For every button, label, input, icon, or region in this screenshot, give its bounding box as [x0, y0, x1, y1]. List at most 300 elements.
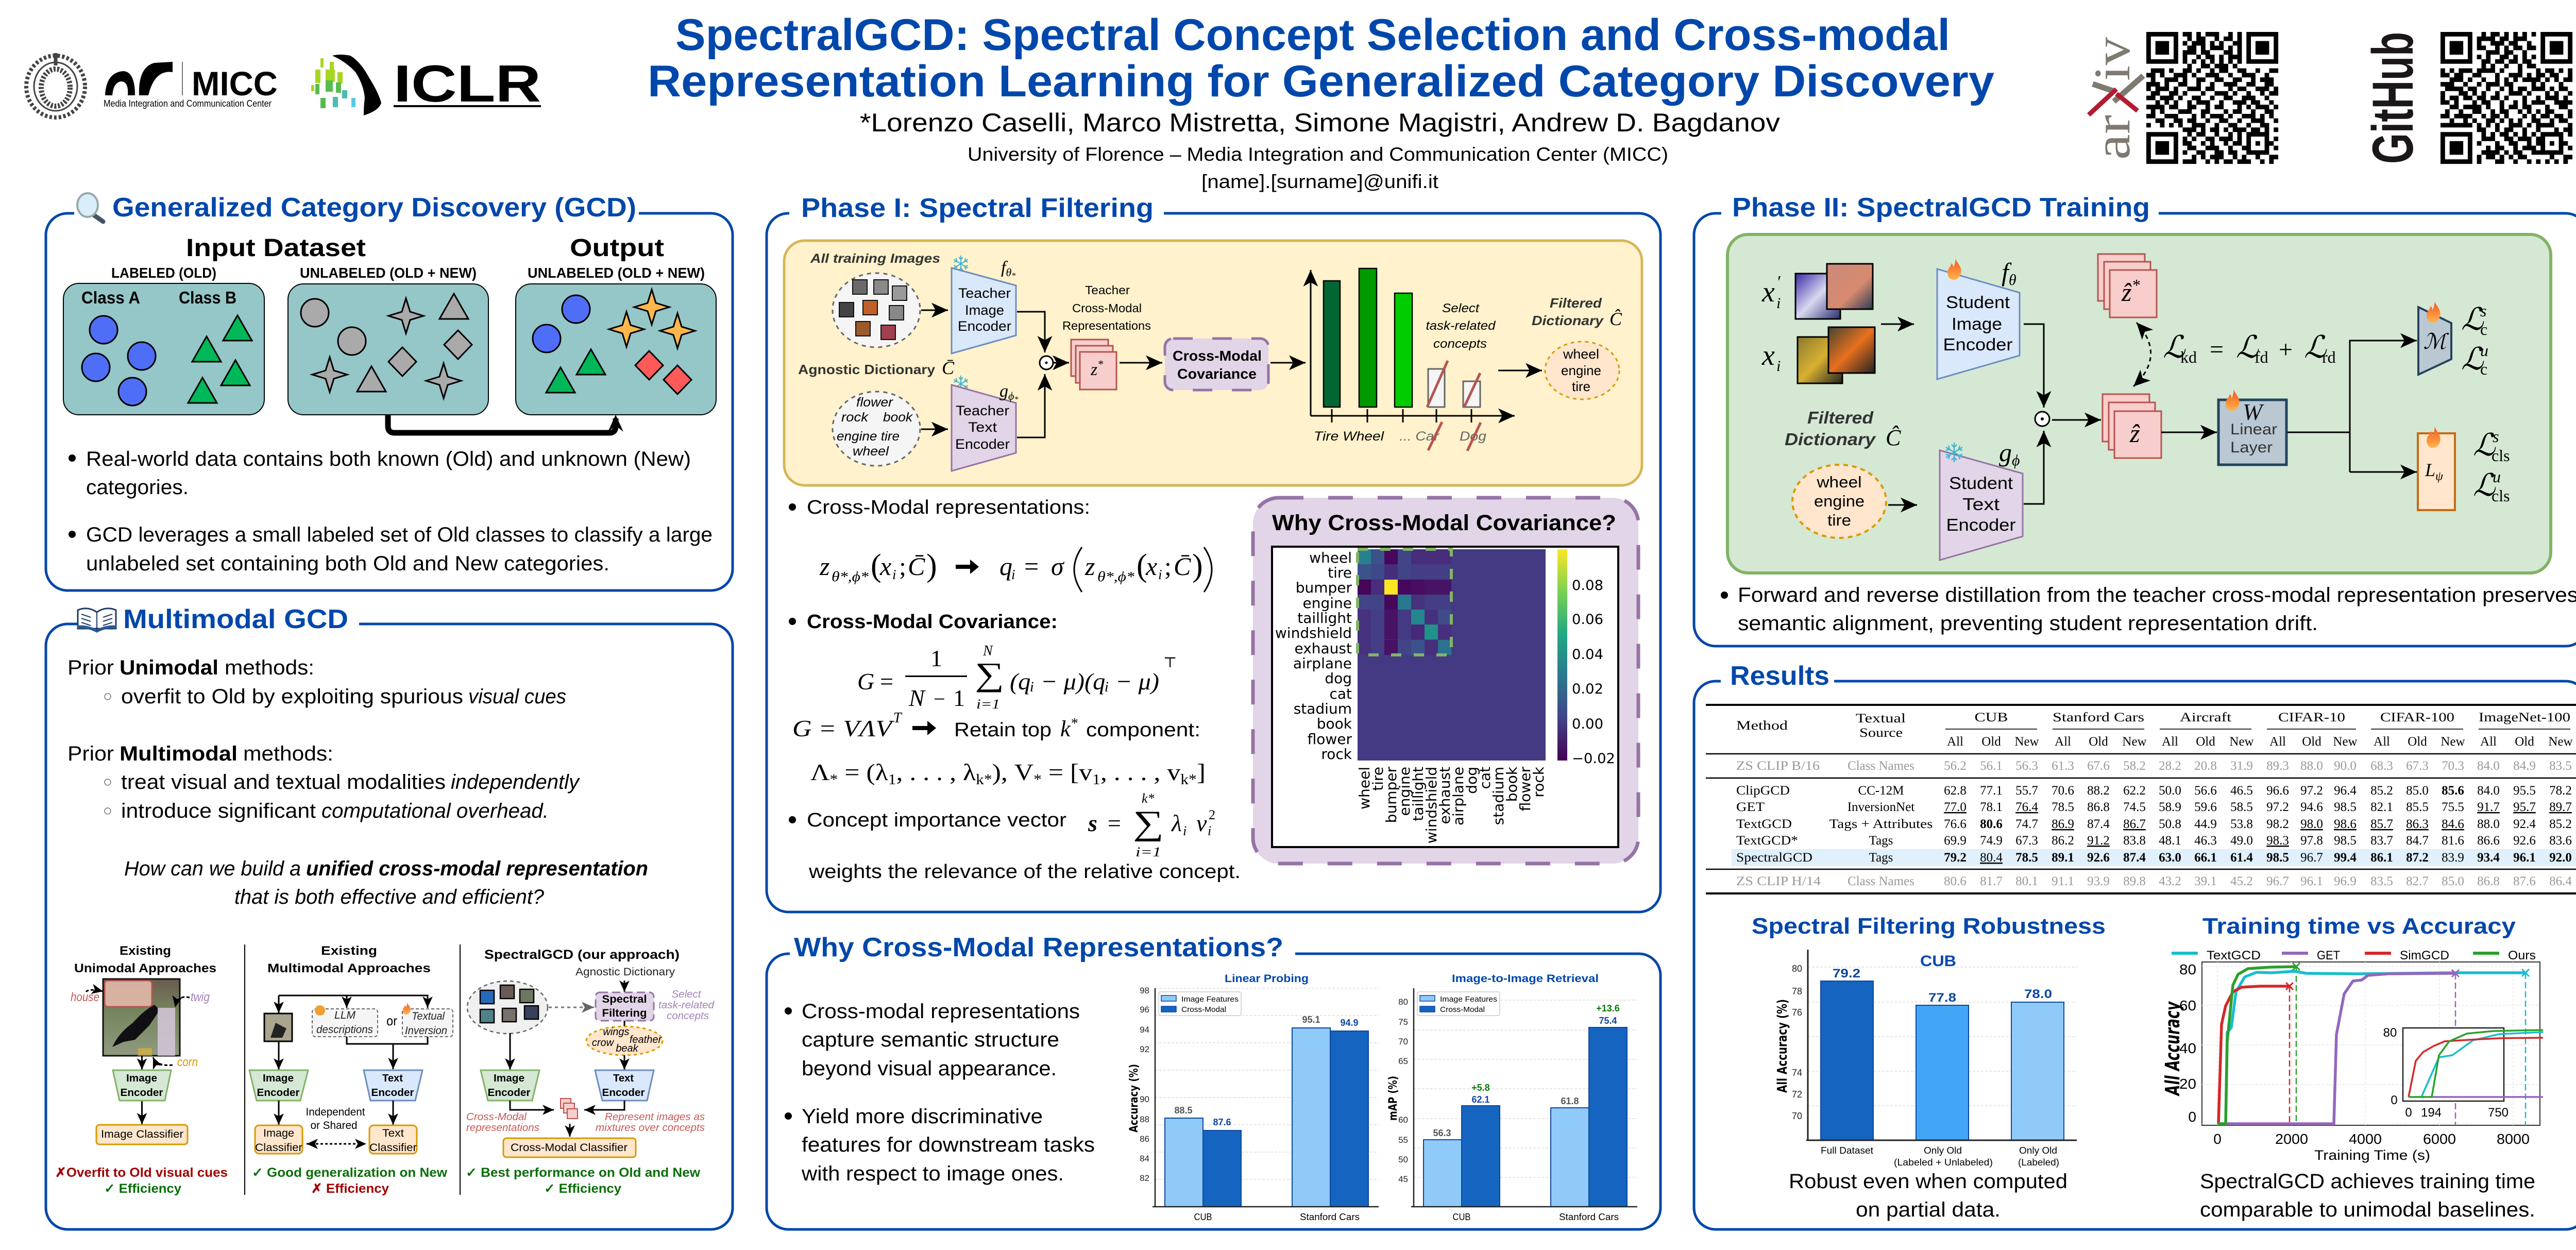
diagram: training pipeline: θ	[2009, 272, 2016, 289]
bar chart: image-to-image retrieval: Cross-Modal	[1440, 1005, 1485, 1014]
diagram: training pipeline: Layer	[2230, 439, 2273, 456]
bar chart: image-to-image retrieval: 70	[1398, 1037, 1408, 1046]
heatmap: engine	[1396, 767, 1413, 816]
caption: robustness: on partial data.	[1856, 1198, 2001, 1221]
diagram: training pipeline: ℒ	[2473, 468, 2496, 502]
column: unimodal: Image	[126, 1073, 157, 1084]
panel: Multimodal GCD	[46, 604, 733, 1229]
diagram: training pipeline: +	[2279, 336, 2293, 363]
bar chart: linear probing: 90	[1140, 1094, 1149, 1104]
text: prior methods: treat visual and textual modalities	[121, 771, 446, 793]
text: eigendecomposition: = (λ	[838, 759, 889, 785]
text: cross-modal representation equation: C̄	[1174, 552, 1191, 581]
inset: early training zoom: 0	[2405, 1106, 2412, 1120]
diagram: training pipeline: ẑ	[2129, 419, 2140, 448]
bar chart: linear probing: Accuracy (%)	[1128, 1064, 1141, 1133]
text: cross-modal representation equation: i	[1011, 567, 1015, 582]
row: SpectralGCD: 96.7	[2300, 851, 2323, 865]
bar chart: image-to-image retrieval	[1387, 973, 1637, 1222]
bar chart: robustness: Only Old	[1924, 1145, 1962, 1156]
table: results: New	[2122, 735, 2147, 749]
text: cross-modal covariance equation: ⊤	[1163, 655, 1177, 671]
text: distillation note	[1721, 584, 2576, 635]
colorbar: 0.08	[1572, 578, 1603, 594]
text: cross-modal representation equation: θ*,ϕ*	[832, 569, 869, 584]
row: TextGCD star: 83.8	[2123, 834, 2146, 848]
logo: MICC: Media Integration and Communication Center	[104, 98, 272, 109]
diagram: spectral filtering pipeline: g	[999, 382, 1008, 401]
heatmap	[1275, 549, 1547, 843]
column: unimodal: Image Classifier	[101, 1128, 183, 1140]
table: results: CUB	[1974, 711, 2008, 724]
text: eigendecomposition: G = VΛV	[792, 715, 895, 741]
column: multimodal: Image	[263, 1073, 294, 1084]
bar chart: image-to-image retrieval: 56.3	[1433, 1128, 1451, 1138]
column: SpectralGCD approach: feather	[630, 1034, 662, 1045]
inset: early training zoom	[2383, 1026, 2543, 1120]
diagram: training pipeline: ℒ	[2304, 330, 2327, 364]
text: prior methods: overfit to Old by exploiting spurious	[121, 685, 463, 708]
diagram: spectral filtering pipeline: z	[1091, 360, 1097, 379]
line chart: training time vs accuracy: 4000	[2349, 1131, 2382, 1147]
text: cross-modal covariance equation: =	[880, 668, 893, 695]
row: TextGCD star: 98.3	[2266, 834, 2289, 848]
row: TextGCD: TextGCD	[1736, 817, 1792, 831]
row: SpectralGCD: 63.0	[2159, 851, 2181, 865]
column: unimodal: Encoder	[121, 1087, 163, 1099]
text: eigendecomposition: k	[1060, 716, 1071, 741]
text: distillation note: semantic alignment, preventing student representation drift.	[1738, 612, 2318, 635]
table: results: All	[2162, 735, 2178, 749]
diagram: training pipeline: ϕ	[2012, 452, 2020, 469]
row: ZS CLIP B/16: 68.3	[2370, 759, 2393, 773]
row: TextGCD star: 97.8	[2300, 834, 2323, 848]
row: TextGCD: 44.9	[2194, 817, 2217, 831]
dataset box: labeled: Class B	[179, 288, 236, 307]
table: results: All	[1947, 735, 1963, 749]
column: SpectralGCD approach	[466, 948, 715, 1196]
diagram: spectral filtering pipeline: Cross-Modal	[1173, 348, 1262, 364]
diagram: training pipeline: Text	[1962, 495, 1999, 514]
text: cross-modal representation equation: (	[871, 548, 882, 583]
row: GET: 75.5	[2442, 800, 2464, 814]
bar chart: robustness: 78	[1792, 986, 1802, 996]
heatmap: wheel	[1356, 767, 1373, 809]
title: SpectralGCD: Spectral Concept Selection and Cross-modal	[675, 10, 1950, 60]
text: cross-modal representation equation: (	[1137, 548, 1147, 583]
logo: University of Florence seal	[26, 53, 85, 117]
line chart: training time vs accuracy: Training Time (s)	[2314, 1147, 2430, 1163]
text: bullets: with respect to image ones.	[801, 1162, 1064, 1185]
row: GET: 58.9	[2159, 800, 2181, 814]
row: ZS CLIP B/16: 67.3	[2406, 759, 2429, 773]
diagram: spectral filtering pipeline: rock	[841, 410, 869, 425]
row: TextGCD	[1736, 817, 2572, 831]
text: prior methods: Prior	[67, 656, 114, 679]
bar chart: robustness: CUB	[1920, 953, 1956, 970]
text: cross-modal covariance equation: (qᵢ − μ)(qᵢ − μ)	[1010, 668, 1159, 695]
column: SpectralGCD approach: representations	[466, 1122, 539, 1134]
heading: Why Cross-Modal Representations: Why Cross-Modal Representations?	[794, 933, 1283, 962]
text: eigendecomposition: T	[893, 710, 903, 726]
text: cross-modal representation equation: Cross-Modal representations:	[807, 497, 1090, 518]
diagram: spectral filtering pipeline: Text	[968, 419, 997, 435]
text: prior methods: Unimodal	[120, 656, 218, 679]
row: TextGCD star: TextGCD*	[1736, 834, 1798, 848]
legend: Ours	[2508, 949, 2536, 962]
table: results: All	[2374, 735, 2390, 749]
heading: Spectral Filtering Robustness: Spectral Filtering Robustness	[1752, 914, 2106, 939]
table: results	[1706, 705, 2576, 893]
text: cross-modal representation equation: )	[1192, 548, 1203, 583]
row: SpectralGCD: 98.5	[2266, 851, 2289, 865]
text: cross-modal representation equation: C̄	[908, 552, 925, 581]
diagram: spectral filtering pipeline: tire	[1572, 379, 1590, 394]
column: SpectralGCD approach: beak	[616, 1043, 639, 1054]
bar chart: robustness: 78.0	[2024, 987, 2052, 1001]
table: results: Old	[2408, 735, 2427, 749]
colorbar: 0.02	[1572, 681, 1603, 697]
text: prior methods: methods:	[225, 656, 314, 679]
dataset box: output	[516, 265, 716, 415]
diagram: training pipeline: x	[1761, 340, 1775, 371]
column: unimodal: ✗Overfit to Old visual cues	[55, 1165, 228, 1180]
text: distillation note: Forward and reverse distillation from the teacher cross-modal representation preserves	[1738, 584, 2576, 606]
text: GCD bullets: categories.	[86, 476, 189, 499]
row: TextGCD: 98.6	[2334, 817, 2357, 831]
diagram: training pipeline: s	[2493, 427, 2499, 446]
diagram: spectral filtering pipeline: Representations	[1062, 319, 1151, 332]
chart: concept selection bars: concepts	[1433, 337, 1487, 351]
column: multimodal	[249, 944, 453, 1196]
heatmap: wheel	[1309, 549, 1352, 566]
bar chart: robustness: 77.8	[1928, 991, 1956, 1005]
heading: Training time vs Accuracy: Training time vs Accuracy	[2202, 914, 2516, 939]
table: results: CIFAR-100	[2380, 711, 2454, 724]
diagram: training pipeline: wheel	[1816, 473, 1862, 491]
chart: concept selection bars: ... Car	[1399, 429, 1440, 444]
bar chart: image-to-image retrieval: Stanford Cars	[1559, 1212, 1619, 1222]
row: SpectralGCD: 66.1	[2194, 851, 2217, 865]
column: unimodal	[55, 944, 228, 1196]
column: SpectralGCD approach: ✓ Best performance on Old and New	[466, 1165, 701, 1180]
row: GET: 89.7	[2549, 800, 2572, 814]
diagram: training pipeline: fd	[2255, 348, 2268, 366]
line chart: training time vs accuracy: 40	[2179, 1040, 2196, 1056]
table: results: CIFAR-10	[2278, 711, 2345, 724]
panel: Results	[1694, 661, 2576, 1229]
column: multimodal: Encoder	[371, 1087, 414, 1099]
text: GCD bullets: unlabeled set containing both Old and New categories.	[86, 552, 609, 575]
bar chart: linear probing: 84	[1140, 1154, 1149, 1163]
diagram: training pipeline: ℒ	[2163, 330, 2186, 364]
text: eigendecomposition: *	[1071, 716, 1078, 732]
row: TextGCD: 87.4	[2087, 817, 2110, 831]
column: SpectralGCD approach: Cross-Modal Classifier	[511, 1142, 628, 1154]
heatmap: exhaust	[1294, 640, 1352, 657]
colorbar: 0.04	[1572, 647, 1603, 663]
text: eigendecomposition: ), V	[992, 759, 1033, 785]
diagram: training pipeline: *	[2131, 276, 2140, 294]
heatmap: cat	[1477, 767, 1494, 789]
diagram: training pipeline: ψ	[2435, 470, 2444, 483]
text: cross-modal representation equation: θ*,ϕ*	[1097, 569, 1135, 584]
column: multimodal: Text	[382, 1073, 403, 1084]
icon: flame	[1947, 258, 1961, 280]
row: ZS CLIP B/16: 84.9	[2513, 759, 2536, 773]
row: ZS CLIP B/16: 84.0	[2477, 759, 2500, 773]
diagram: spectral filtering pipeline: engine tire	[837, 429, 900, 444]
line chart: training time vs accuracy: 80	[2179, 961, 2196, 977]
bar chart: linear probing: Image Features	[1181, 995, 1239, 1004]
row: GET: InversionNet	[1848, 800, 1914, 814]
text: prior methods: computational overhead.	[321, 800, 549, 822]
bar chart: linear probing: 95.1	[1302, 1015, 1320, 1025]
text: research question	[124, 857, 648, 908]
text: concept importance: Concept importance vector	[807, 809, 1066, 831]
column: multimodal: Inversion	[405, 1025, 447, 1037]
row: ZS CLIP B/16: 61.3	[2052, 759, 2074, 773]
diagram: spectral filtering pipeline: Teacher	[958, 285, 1011, 301]
images: augmented views	[1795, 264, 1875, 383]
row: ClipGCD: 96.6	[2266, 784, 2289, 798]
text: cross-modal covariance equation: G	[857, 668, 874, 695]
column: SpectralGCD approach: wings	[603, 1026, 630, 1038]
bar chart: robustness: Full Dataset	[1821, 1145, 1873, 1156]
bar chart: linear probing: Stanford Cars	[1300, 1212, 1360, 1222]
legend: TextGCD	[2207, 949, 2261, 962]
dataset box: output: UNLABELED (OLD + NEW)	[528, 265, 705, 281]
row: SpectralGCD: 78.5	[2015, 851, 2038, 865]
row: GET: GET	[1736, 800, 1765, 814]
diagram: training pipeline: ẑ	[2122, 278, 2131, 307]
text: bullets: Cross-modal representations	[802, 1000, 1080, 1023]
diagram: training pipeline: kd	[2180, 348, 2197, 366]
column: multimodal: Independent	[306, 1106, 365, 1118]
text: cross-modal covariance equation: Cross-Modal Covariance:	[807, 611, 1058, 633]
bar chart: linear probing: 98	[1140, 986, 1149, 995]
row: TextGCD: 88.0	[2477, 817, 2500, 831]
text: prior methods: Multimodal	[120, 742, 238, 765]
row: ZS CLIP B/16: 67.6	[2087, 759, 2110, 773]
row: GET: 94.6	[2300, 800, 2323, 814]
table: results: All	[2480, 735, 2497, 749]
logo: MICC: MICC	[192, 64, 278, 103]
header: logos, title, authors	[26, 10, 2572, 192]
row: ClipGCD: 77.1	[1980, 784, 2003, 798]
row: ZS CLIP H/14: 87.6	[2513, 874, 2536, 888]
row: TextGCD star: 46.3	[2194, 834, 2217, 848]
row: TextGCD: 86.7	[2123, 817, 2146, 831]
text: eigendecomposition: k*	[976, 772, 992, 788]
row: SpectralGCD: 92.6	[2087, 851, 2110, 865]
diagram: spectral filtering pipeline	[784, 241, 1642, 485]
chart: concept selection bars: Tire Wheel	[1314, 429, 1385, 444]
text: GCD bullets: GCD leverages a small labeled set of Old classes to classify a large	[86, 523, 713, 546]
row: ClipGCD: 95.5	[2513, 784, 2536, 798]
heatmap: windshield	[1275, 624, 1352, 641]
text: prior methods: introduce significant	[121, 800, 316, 822]
bar chart: image-to-image retrieval: 50	[1398, 1155, 1408, 1164]
diagram: training pipeline: u	[2493, 467, 2501, 486]
bar chart: image-to-image retrieval: +5.8	[1471, 1083, 1490, 1093]
text: bullets: beyond visual appearance.	[802, 1057, 1057, 1080]
heatmap: exhaust	[1436, 767, 1453, 824]
row: ZS CLIP B/16: ZS CLIP B/16	[1736, 759, 1820, 773]
bar chart: linear probing: 92	[1140, 1044, 1149, 1054]
row: TextGCD: 76.6	[1944, 817, 1967, 831]
heatmap: flower	[1517, 767, 1534, 811]
column: multimodal: Encoder	[257, 1087, 300, 1099]
table: results: New	[2014, 735, 2039, 749]
diagram: spectral filtering pipeline: flower	[856, 395, 894, 410]
inset: early training zoom: 0	[2391, 1093, 2398, 1107]
row: TextGCD star: 86.2	[2052, 834, 2074, 848]
row: ZS CLIP H/14: 93.9	[2087, 874, 2110, 888]
row: ZS CLIP H/14: 82.7	[2406, 874, 2429, 888]
row: SpectralGCD: 83.9	[2442, 851, 2464, 865]
heatmap: cat	[1329, 685, 1352, 702]
dataset box: labeled: Class A	[81, 288, 140, 307]
email: [name].[surname]@unifi.it	[1201, 171, 1439, 192]
bar chart: linear probing: Linear Probing	[1225, 973, 1309, 985]
table: results: All	[2055, 735, 2071, 749]
diagram: spectral filtering pipeline: *	[1014, 395, 1018, 404]
column: SpectralGCD approach: crow	[592, 1037, 615, 1049]
column: SpectralGCD approach: Select	[672, 989, 702, 1000]
bar chart: robustness: All Accuracy (%)	[1775, 999, 1790, 1093]
panel: Phase I Spectral Filtering	[767, 193, 1660, 912]
heatmap: rock	[1321, 746, 1352, 763]
text: bullets: capture semantic structure	[802, 1028, 1059, 1051]
text: cross-modal covariance equation: 1	[930, 645, 942, 671]
diagram: spectral filtering pipeline: Cross-Modal	[1072, 301, 1142, 315]
table: results: Old	[1981, 735, 2001, 749]
diagram: training pipeline: rd	[2322, 348, 2336, 366]
row: GET: 58.5	[2230, 800, 2253, 814]
icon: snowflake	[1946, 443, 1962, 462]
row: SpectralGCD: Tags	[1869, 851, 1893, 865]
row: TextGCD star: 69.9	[1944, 834, 1967, 848]
bar chart: image-to-image retrieval: 80	[1398, 997, 1408, 1007]
text: cross-modal representation equation: σ	[1051, 552, 1065, 581]
bar chart: linear probing: 88.5	[1174, 1105, 1193, 1116]
diagram: training pipeline: x	[1761, 276, 1775, 308]
text: GCD bullets: Real-world data contains both known (Old) and unknown (New)	[86, 448, 691, 470]
row: SpectralGCD: 87.2	[2406, 851, 2429, 865]
column: SpectralGCD approach: task-related	[658, 1000, 715, 1011]
row: TextGCD star: 81.6	[2442, 834, 2464, 848]
row: SpectralGCD: SpectralGCD	[1736, 851, 1812, 865]
bar chart: robustness: 72	[1792, 1089, 1802, 1100]
row: GET: 59.6	[2194, 800, 2217, 814]
row: TextGCD: 98.2	[2266, 817, 2289, 831]
text: bullets: Yield more discriminative	[802, 1105, 1043, 1128]
text: cross-modal representation equation: i	[1158, 567, 1162, 582]
column: multimodal: Classifier	[255, 1142, 302, 1154]
column: SpectralGCD approach: ✓ Efficiency	[544, 1181, 621, 1196]
row: ZS CLIP H/14: 86.8	[2477, 874, 2500, 888]
row: ZS CLIP B/16: 58.2	[2123, 759, 2146, 773]
row: ClipGCD: 78.2	[2549, 784, 2572, 798]
row: TextGCD star: 98.5	[2334, 834, 2357, 848]
text: eigendecomposition: , . . . , λ	[896, 759, 976, 785]
row: ClipGCD: 62.2	[2123, 784, 2146, 798]
column: SpectralGCD approach: Spectral	[602, 993, 647, 1005]
column: unimodal: house	[71, 990, 99, 1004]
row: ZS CLIP B/16: Class Names	[1848, 759, 1914, 773]
logo: ICLR: ICLR	[394, 55, 541, 113]
bar chart: image-to-image retrieval: 45	[1398, 1174, 1408, 1184]
text: cross-modal representation equation: ;	[1164, 552, 1172, 581]
text: cross-modal covariance equation: N	[982, 643, 993, 659]
row: ClipGCD: CC-12M	[1858, 784, 1904, 798]
row: ClipGCD: 70.6	[2052, 784, 2074, 798]
bar chart: robustness: 80	[1792, 964, 1802, 974]
column: SpectralGCD approach: mixtures over concepts	[596, 1122, 705, 1134]
heading: input dataset: Input Dataset	[186, 234, 366, 262]
bar chart: image-to-image retrieval: 55	[1398, 1135, 1408, 1145]
text: concept importance: s	[1088, 810, 1097, 836]
heatmap: windshield	[1423, 767, 1440, 843]
column: multimodal: Textual	[412, 1010, 445, 1022]
caption: training time	[2200, 1170, 2535, 1221]
colorbar: 0.00	[1572, 716, 1603, 732]
row: TextGCD star: 74.9	[1980, 834, 2003, 848]
diagram: training pipeline: cls	[2492, 446, 2510, 465]
row: TextGCD: 50.8	[2159, 817, 2181, 831]
heading: Multimodal GCD: Multimodal GCD	[123, 604, 348, 634]
row: SpectralGCD: 93.4	[2477, 851, 2500, 865]
bar chart: image-to-image retrieval: mAP (%)	[1387, 1076, 1400, 1121]
icon: snowflake	[954, 256, 968, 272]
row: TextGCD star: 83.6	[2549, 834, 2572, 848]
legend: GET	[2317, 949, 2340, 962]
diagram: approach comparison	[55, 944, 715, 1196]
row: ZS CLIP H/14: 45.2	[2230, 874, 2253, 888]
diagram: spectral filtering pipeline: wheel	[853, 444, 890, 459]
row: ZS CLIP H/14: 91.1	[2052, 874, 2074, 888]
dataset box: labeled	[63, 265, 264, 415]
bar chart: image-to-image retrieval: 75.4	[1599, 1016, 1617, 1026]
diagram: training pipeline: Student	[1946, 293, 2010, 312]
row: ZS CLIP H/14: 80.1	[2015, 874, 2038, 888]
diagram: training pipeline: Student	[1949, 474, 2013, 493]
inset: early training zoom: 750	[2488, 1106, 2509, 1120]
text: cross-modal representation equation: x	[879, 552, 891, 581]
diagram: spectral filtering pipeline: All training Images	[810, 251, 940, 266]
table: results: Source	[1859, 726, 1903, 740]
row: ClipGCD: 96.4	[2334, 784, 2357, 798]
column: multimodal: Classifier	[369, 1142, 417, 1154]
diagram: training pipeline: =	[2210, 336, 2224, 363]
text: research question: unified cross-modal representation	[306, 857, 648, 880]
row: GET: 74.5	[2123, 800, 2146, 814]
heatmap: flower	[1308, 731, 1352, 748]
column: multimodal: ✗ Efficiency	[311, 1181, 389, 1196]
bar chart: linear probing: 86	[1140, 1134, 1149, 1144]
row: GET: 86.8	[2087, 800, 2110, 814]
row: GET: 78.5	[2052, 800, 2074, 814]
text: concept importance: i=1	[1136, 844, 1161, 859]
line chart: training time vs accuracy: 8000	[2497, 1131, 2530, 1147]
text: bullets: features for downstream tasks	[802, 1134, 1095, 1156]
row: ZS CLIP B/16	[1736, 759, 2572, 773]
text: eigendecomposition	[792, 710, 1206, 788]
bar chart: image-to-image retrieval: 65	[1398, 1056, 1408, 1066]
row: SpectralGCD: 87.4	[2123, 851, 2146, 865]
bar chart: image-to-image retrieval: Image-to-Image Retrieval	[1452, 973, 1599, 985]
